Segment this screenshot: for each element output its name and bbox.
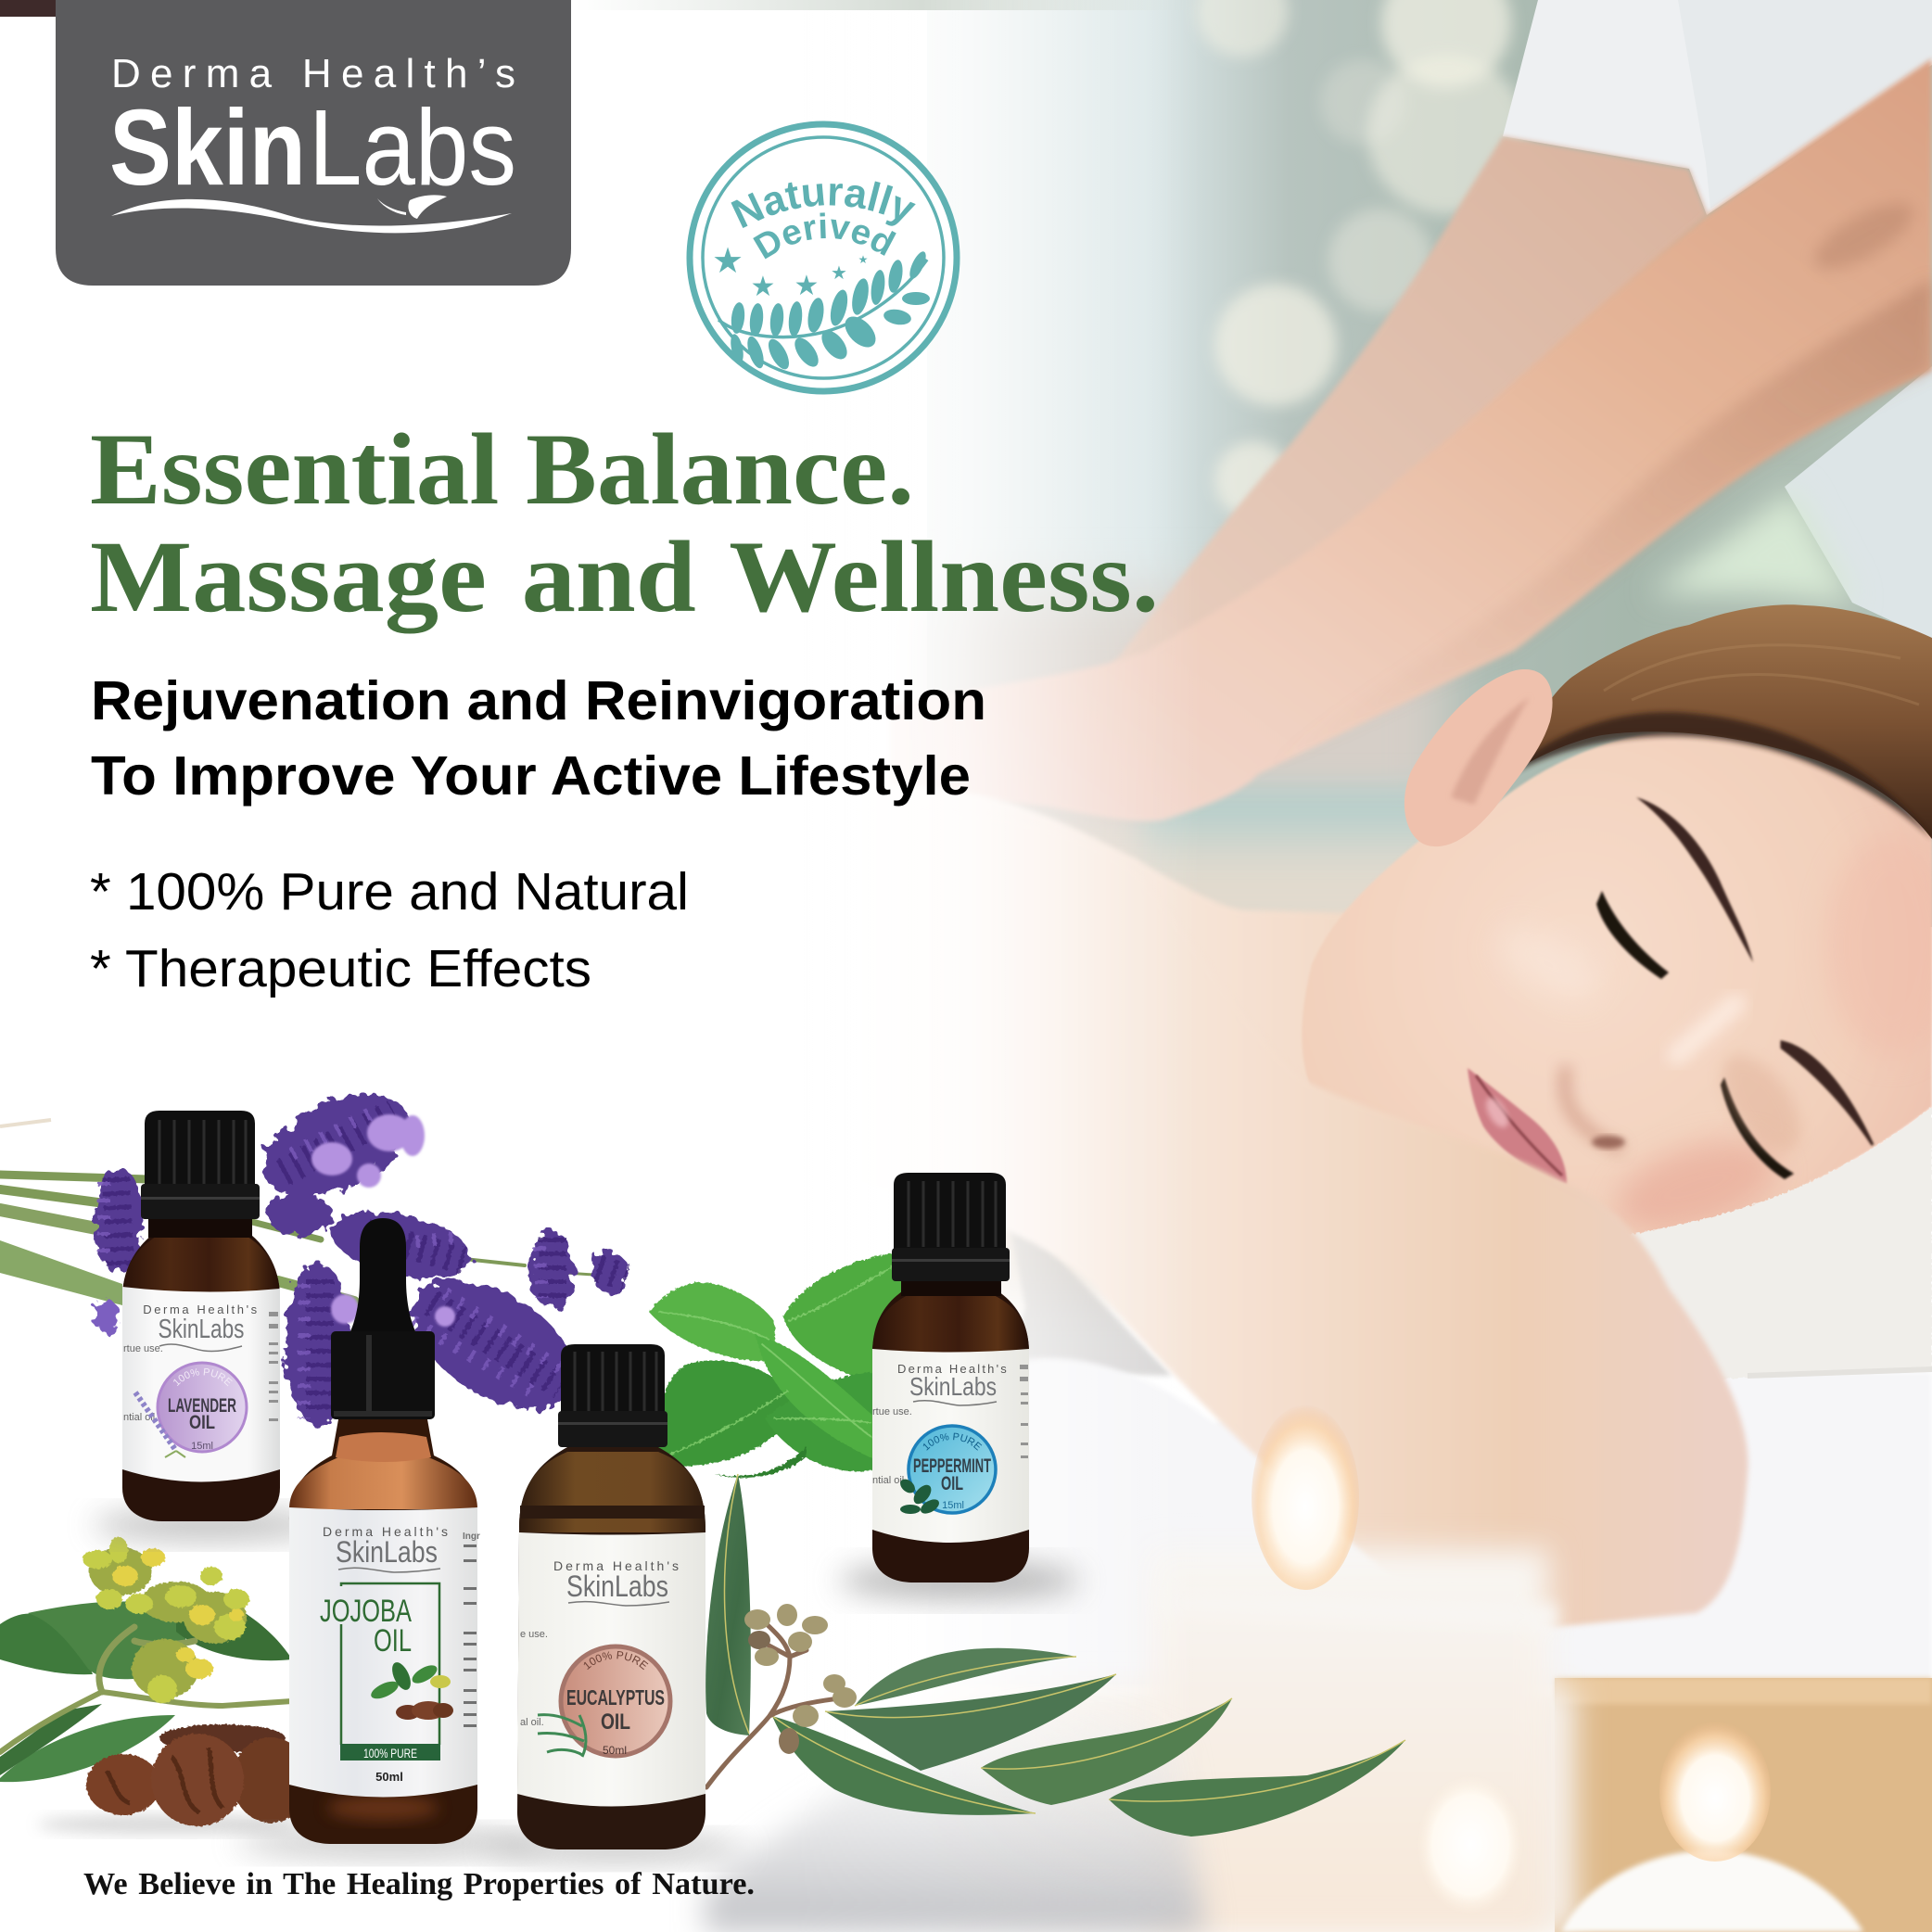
eucalyptus bottle glass	[517, 1447, 705, 1849]
peppermint label	[872, 1349, 1029, 1543]
top left dark corner	[0, 0, 56, 17]
mint leaves	[649, 1252, 904, 1478]
eucalyptus badge: 50ml	[603, 1744, 627, 1757]
big blurred candle	[1150, 1549, 1557, 1932]
peppermint badge: PEPPERMINT	[913, 1455, 991, 1477]
badge stars: ★	[712, 240, 744, 281]
bottle: jojoba oil: 50ml	[375, 1770, 403, 1784]
bottle: jojoba oil: SkinLabs	[336, 1535, 438, 1569]
lavender bottle glass	[122, 1219, 280, 1521]
logo panel	[56, 0, 571, 286]
subheading: To Improve Your Active Lifestyle	[91, 745, 971, 807]
bottle: peppermint oil: Derma Health's	[897, 1362, 1009, 1376]
jojoba plant and seeds	[0, 1537, 310, 1834]
photo: massage scene background	[705, 0, 1932, 1932]
eucalyptus badge: EUCALYPTUS	[566, 1685, 665, 1710]
bottle: lavender oil: rtue use.	[123, 1343, 163, 1354]
benefits list	[90, 862, 689, 998]
bottle: jojoba oil: Ingr	[463, 1532, 480, 1542]
jojoba mini illustration	[369, 1659, 453, 1720]
jojoba pure bar	[340, 1744, 440, 1760]
therapist front arm	[890, 58, 1932, 821]
closed eye lower	[1782, 1042, 1873, 1145]
bottle: eucalyptus oil: e use.	[520, 1629, 548, 1640]
lavender sprigs	[0, 1074, 628, 1436]
logo: swoosh and leaf	[111, 195, 512, 233]
subheading: Rejuvenation and Reinvigoration	[91, 670, 986, 731]
small white candle	[1561, 1850, 1863, 1932]
woman: back and neck	[742, 779, 1354, 1205]
lavender badge: OIL	[189, 1412, 215, 1433]
bottle: peppermint oil: ntial oil.	[872, 1475, 907, 1486]
subheading	[91, 670, 986, 807]
nose shadow	[1565, 1066, 1622, 1150]
jojoba title: OIL	[374, 1623, 412, 1659]
bottle: eucalyptus oil	[491, 1344, 744, 1873]
jojoba title: JOJOBA	[320, 1594, 412, 1629]
eucalyptus label	[517, 1532, 705, 1806]
peppermint badge: 15ml	[942, 1500, 964, 1511]
eucalyptus branch	[705, 1474, 1405, 1837]
benefits list: * Therapeutic Effects	[90, 939, 591, 998]
badge stars	[712, 240, 868, 303]
badge stars: ★	[858, 253, 868, 266]
bokeh lights	[1196, 0, 1527, 519]
badge stars: ★	[794, 270, 819, 302]
lavender bottle cap	[141, 1111, 260, 1238]
logo: Derma Health's: Derma Health’s	[111, 51, 515, 96]
bottle: peppermint oil: rtue use.	[872, 1406, 912, 1417]
lavender badge: 15ml	[191, 1441, 213, 1452]
logo: SkinLabs wordmark	[109, 87, 516, 208]
badge stars: ★	[751, 271, 775, 303]
lips	[1468, 1068, 1567, 1184]
bottle: eucalyptus oil: SkinLabs	[566, 1570, 668, 1603]
lavender badge: 100% PURE	[173, 1368, 232, 1387]
peppermint badge: OIL	[941, 1473, 963, 1494]
badge laurel	[718, 249, 930, 373]
bottle: lavender oil: SkinLabs	[158, 1315, 245, 1344]
eucalyptus badge: 100% PURE	[584, 1651, 649, 1671]
badge: Naturally Derived: Derived	[753, 212, 896, 260]
benefits list: * 100% Pure and Natural	[90, 862, 689, 922]
jojoba seeds	[86, 1724, 310, 1826]
candle flames	[1252, 1405, 1771, 1915]
badge stars: ★	[831, 261, 847, 284]
peppermint badge	[900, 1424, 998, 1515]
bottle: lavender oil	[91, 1111, 360, 1570]
woman: hair	[1503, 604, 1932, 839]
lower towel and bed	[927, 1203, 1932, 1932]
top edge band	[575, 0, 1205, 10]
badge: Naturally Derived	[686, 121, 960, 395]
bottle: jojoba oil: Derma Health's	[323, 1524, 451, 1539]
gum nuts and twig	[706, 1604, 857, 1787]
tagline: We Believe in The Healing Properties of Nature.	[83, 1867, 755, 1901]
bottle: eucalyptus oil: Derma Health's	[553, 1558, 681, 1573]
lavender flower clusters	[94, 1074, 628, 1436]
heading: Massage and Wellness.	[90, 520, 1159, 633]
therapist rear arm	[1103, 136, 1708, 677]
jojoba title	[320, 1594, 412, 1659]
eucalyptus badge	[538, 1645, 673, 1758]
logo: SkinLabs wordmark: Skin	[109, 87, 306, 208]
head towel	[1576, 1107, 1932, 1381]
lavender badge: LAVENDER	[168, 1395, 236, 1417]
lavender floret detail	[104, 1108, 626, 1418]
eucalyptus badge: OIL	[601, 1710, 630, 1735]
bottle: lavender oil: ntial oil.	[123, 1412, 158, 1423]
peppermint badge: 100% PURE	[923, 1433, 983, 1451]
heading	[90, 413, 1159, 633]
peppermint bottle glass	[872, 1282, 1029, 1582]
bottle: lavender oil: Derma Health's	[143, 1303, 260, 1316]
jojoba label	[289, 1507, 477, 1797]
white fade overlay on left	[0, 0, 1205, 1932]
heading: Essential Balance.	[90, 413, 914, 526]
jojoba dropper	[331, 1218, 435, 1419]
bottle: eucalyptus oil: al oil.	[520, 1717, 544, 1728]
bottle: peppermint oil	[833, 1173, 1085, 1614]
closed eye upper	[1636, 797, 1753, 962]
lavender badge	[133, 1361, 248, 1458]
woman: face	[1302, 732, 1932, 1250]
soft grey table shadow	[705, 1717, 1205, 1932]
bottle: peppermint oil: SkinLabs	[909, 1372, 997, 1401]
badge text: Naturally	[731, 182, 916, 228]
peppermint bottle cap	[892, 1173, 1010, 1296]
jojoba bottle glass	[289, 1419, 477, 1844]
jojoba frame	[341, 1583, 439, 1745]
woman: upper arm	[705, 811, 1748, 1627]
jojoba pure bar: 100% PURE	[363, 1746, 417, 1760]
woman: ear	[1405, 669, 1553, 846]
therapist shirt	[1503, 0, 1932, 640]
lavender label	[122, 1287, 280, 1481]
bottle: jojoba oil	[236, 1218, 542, 1856]
logo: SkinLabs wordmark: Labs	[309, 87, 516, 208]
jojoba flowers	[83, 1537, 249, 1703]
eucalyptus bottle cap	[558, 1344, 667, 1447]
